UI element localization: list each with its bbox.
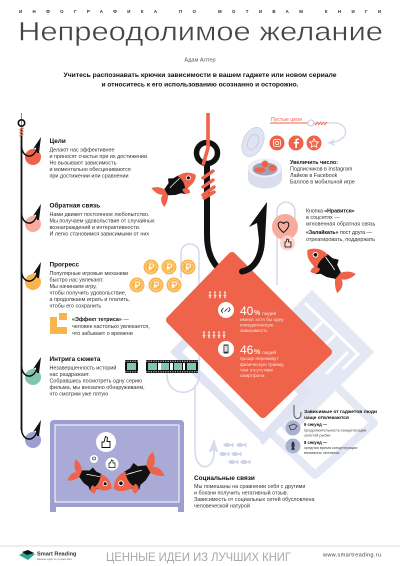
text block: attention span <box>304 409 377 421</box>
text block: feedback: Обратная связь <box>50 202 100 210</box>
hook marker: feedback <box>22 204 41 232</box>
text block: plot intrigue <box>50 356 145 398</box>
text block: social connections <box>194 475 314 510</box>
text block: social connections: Мы помешаны на сравнении себя с другими <box>194 484 305 490</box>
stat: 46 percent: смартфона <box>240 373 265 378</box>
stat: 46 percent: проще переживут <box>240 356 279 361</box>
text block: social connections: Зависимость от социальных сетей обусловлена <box>194 496 314 503</box>
text block: progress: Популярные игровые механики <box>50 271 128 277</box>
text block: goals <box>50 138 148 180</box>
stat: 40 percent: людей <box>262 310 276 316</box>
stat: 9 seconds <box>286 420 366 438</box>
stat: 8 seconds: внимания человека <box>304 450 340 455</box>
callout: tetris effect: человек настолько увлекается, <box>72 324 150 330</box>
stat: 46 percent: 46 <box>240 343 254 357</box>
hook marker: goals <box>22 137 41 165</box>
text block: goals: Но вызывают зависимость <box>50 160 117 166</box>
stat: 46 percent <box>218 341 284 378</box>
central hook: shank behind tag <box>196 113 220 270</box>
stat: 46 percent: % <box>254 349 261 356</box>
text block: like button: в соцсетях — <box>306 215 340 221</box>
text block: plot intrigue: фильма, мы внезапно обнаруживаем, <box>50 385 145 391</box>
text block: feedback: вознаграждений и интерактивности. <box>50 224 140 231</box>
footer: logo <box>19 550 77 561</box>
empty goals caption <box>270 117 322 123</box>
small hook <box>308 120 346 146</box>
title: Непреодолимое желание <box>18 16 383 46</box>
hook marker: social <box>22 420 41 448</box>
text block: feedback: Нами движет постоянное любопытство. <box>50 212 149 218</box>
text block: plot intrigue: Интрига сюжета <box>50 356 101 363</box>
text block: progress: чтобы получить удовольствие, <box>50 290 127 296</box>
central hook: arm in front of tag <box>242 202 267 272</box>
stat: 40 percent: % <box>254 310 261 317</box>
text block: progress: чтобы его сохранить <box>50 304 101 310</box>
small pale fish school <box>219 442 250 464</box>
text block: social connections: Социальные связи <box>194 475 255 482</box>
background: pale rotated device shapes <box>170 290 374 475</box>
stat: 40 percent: имеют хотя бы одну <box>240 317 284 322</box>
text block: like button: «Залайкать» пост друга — <box>306 229 373 236</box>
icon: small hook for attention block <box>294 405 301 418</box>
empty goals caption: Пустые цели <box>271 117 302 123</box>
text block: increase the number <box>290 160 355 186</box>
icon: film strips <box>125 360 198 373</box>
stat: 40 percent: 40 <box>240 304 254 318</box>
stat: 40 percent: поведенческую <box>240 322 274 328</box>
text block: like button: отреагировать, поддержать <box>306 237 375 243</box>
stat icon row: 46 percent people <box>202 331 226 338</box>
text block: progress: Мы начинаем игру, <box>50 284 97 290</box>
callout: tetris effect: «Эффект тетриса» — <box>72 316 129 323</box>
top caption: ИНФОГРАФИКА ПО МОТИВАМ КНИГИ <box>19 9 381 14</box>
footer: website: www.smartreading.ru <box>322 552 381 558</box>
left fishing line <box>18 113 25 430</box>
text block: progress: Прогресс <box>50 262 79 268</box>
tin can <box>237 124 282 188</box>
callout: tetris effect: что забывает о времени <box>72 331 133 337</box>
coins <box>130 260 196 292</box>
text block: social connections: и боязни получить негативный отзыв. <box>194 490 288 496</box>
stat: 9 seconds: золотой рыбки <box>304 432 330 438</box>
stat: 8 seconds <box>286 438 357 455</box>
fish at hook <box>151 166 202 208</box>
text block: attention span: Зависимые от гаджетов люди <box>304 409 377 415</box>
text block: like button: Кнопка «Нравится» <box>306 208 355 214</box>
stat: 9 seconds: продолжительность концентрации <box>304 428 366 432</box>
text block: attention span: чаще отвлекаются <box>304 416 349 421</box>
footer: slogan: ЦЕННЫЕ ИДЕИ ИЗ ЛУЧШИХ КНИГ <box>106 550 291 564</box>
text block: goals: Делают нас эффективнее <box>50 148 115 154</box>
stat: 8 seconds: средняя время концентрации <box>304 445 357 450</box>
text block: progress <box>50 262 131 310</box>
social icons <box>270 136 322 150</box>
text block: increase the number: Лайков в Facebook <box>290 172 338 179</box>
text block: goals: и моментально обесцениваются <box>50 167 131 173</box>
text block: goals: и приносят счастье при их достижении. <box>50 154 148 160</box>
text block: feedback: И легко становимся зависимыми от них <box>50 232 149 238</box>
fish at like button <box>298 240 356 295</box>
text block: feedback: Мы получаем удовольствие от случайных <box>50 218 155 224</box>
stat: 40 percent <box>218 302 284 333</box>
stat: 46 percent: чем отсутствие <box>240 368 274 372</box>
text block: feedback <box>50 202 155 238</box>
tag: red diamond with statistics <box>170 256 328 414</box>
author: Адам Алтер <box>184 58 216 64</box>
stat icon row: 40 percent people <box>208 291 227 298</box>
footer: logo: Smart Reading <box>37 552 77 558</box>
text block: like button: мгновенная обратная связь <box>306 222 376 228</box>
text block: plot intrigue: нас раздражает. <box>50 372 90 378</box>
subtitle: и относитесь к его использованию осознанно и осторожно. <box>102 82 299 88</box>
text block: like button <box>306 208 376 243</box>
stat: 40 percent: зависимость <box>240 328 268 333</box>
text block: increase the number: Баллов в мобильной игре <box>290 178 355 186</box>
stat: 46 percent: людей <box>262 349 276 355</box>
stat: 8 seconds: 8 секунд — <box>304 440 328 445</box>
text block: goals: Цели <box>50 138 66 145</box>
subtitle <box>64 72 337 88</box>
hook marker: plot intrigue <box>22 357 41 385</box>
text block: increase the number: Подписчиков в Instagram <box>290 166 353 172</box>
callout: tetris effect <box>72 316 150 337</box>
subtitle: Учитесь распознавать крючки зависимости в вашем гаджете или новом сериале <box>64 72 337 79</box>
stat: 9 seconds: 9 секунд — <box>304 422 328 427</box>
footer: logo: Ценные идеи из лучших книг <box>37 557 72 561</box>
text block: progress: а продолжаем играть и платить, <box>50 297 131 303</box>
hook marker: progress <box>22 262 41 290</box>
text block: social connections: человеческой натурой <box>194 502 250 510</box>
background: pale paperclip hooks <box>164 244 217 467</box>
stat: 46 percent: физическую травму, <box>240 362 284 367</box>
text block: increase the number: Увеличить число: <box>290 160 338 166</box>
text block: plot intrigue: Незавершенность историй <box>50 364 116 372</box>
text block: plot intrigue: что смотрим уже пятую <box>50 392 108 398</box>
like button hook <box>272 202 298 285</box>
text block: plot intrigue: Собравшись посмотреть одну серию <box>50 378 142 384</box>
text block: goals: при достижении или сравнении <box>50 174 129 180</box>
icon: tetris blocks <box>50 313 67 334</box>
aquarium <box>50 420 184 512</box>
text block: progress: быстро нас увлекают. <box>50 278 104 284</box>
